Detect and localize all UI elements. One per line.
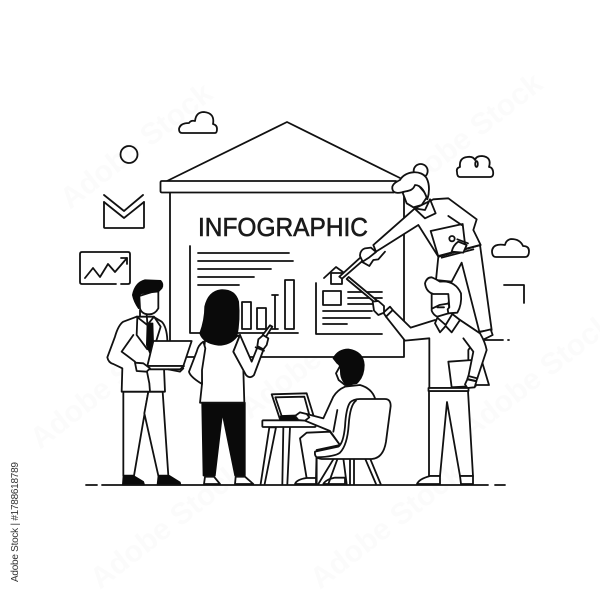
hair xyxy=(392,172,429,199)
lapels and tie xyxy=(147,323,153,353)
chair xyxy=(315,399,391,459)
right arm xyxy=(460,320,487,388)
shirt xyxy=(200,335,244,403)
left arm xyxy=(189,342,205,384)
hair xyxy=(133,280,163,308)
watermark: Adobe Stock xyxy=(384,66,549,206)
watermark: Adobe Stock xyxy=(54,76,219,216)
left chart panel xyxy=(190,246,298,333)
person: seated man at desk xyxy=(261,349,391,484)
folder back xyxy=(470,355,489,385)
leg back xyxy=(436,245,492,332)
board body xyxy=(170,192,404,357)
head xyxy=(336,365,352,385)
stock id caption: Adobe Stock | #1788618789 xyxy=(10,462,21,582)
face xyxy=(403,183,428,207)
icon: cloud top left xyxy=(179,112,217,133)
ear xyxy=(448,299,453,308)
desk xyxy=(261,420,316,484)
hair xyxy=(200,290,239,345)
hand xyxy=(360,248,376,262)
collar xyxy=(414,199,436,218)
shoe xyxy=(478,329,493,339)
watermark: Adobe Stock xyxy=(234,286,399,426)
person: man with pointer and folder xyxy=(347,277,489,388)
laptop xyxy=(147,341,192,366)
bun xyxy=(414,164,428,178)
icon: cloud right lower xyxy=(492,239,529,257)
folder front xyxy=(448,360,476,387)
roof band xyxy=(160,181,396,192)
hand and pen xyxy=(257,335,268,349)
torso and arm xyxy=(386,310,480,388)
hair xyxy=(425,277,461,313)
face xyxy=(432,293,451,317)
right text panel xyxy=(316,267,382,334)
hand xyxy=(135,363,150,372)
hand and cuff xyxy=(383,307,393,317)
person: woman from behind xyxy=(189,290,272,484)
icon: chart card xyxy=(80,252,130,284)
face xyxy=(139,290,158,314)
jacket xyxy=(107,317,167,392)
man legs and shoes xyxy=(417,388,473,484)
ground line xyxy=(86,484,505,486)
pointer stick xyxy=(339,253,367,279)
neck xyxy=(140,310,147,323)
watermark: Adobe Stock xyxy=(84,456,249,596)
watermark: Adobe Stock xyxy=(304,456,469,596)
presentation board xyxy=(160,122,404,357)
decoration: corner bracket xyxy=(504,285,524,303)
icon: circle xyxy=(120,146,138,163)
watermark: Adobe Stock xyxy=(24,316,189,456)
legs xyxy=(123,392,148,476)
laptop xyxy=(272,393,313,419)
roof xyxy=(167,122,400,181)
person: man in suit with laptop xyxy=(107,280,192,485)
board title: INFOGRAPHIC xyxy=(198,212,368,242)
chair legs xyxy=(317,458,381,484)
shoes and shins xyxy=(300,432,340,478)
decoration: short dash by climbing figure xyxy=(485,339,509,341)
person: woman climbing with laptop xyxy=(339,164,493,339)
pointer stick xyxy=(347,277,379,304)
hand xyxy=(295,412,309,421)
trousers xyxy=(202,403,245,476)
shoes xyxy=(123,476,144,485)
collar xyxy=(435,314,460,332)
icon: envelope xyxy=(104,195,144,228)
torso and arm xyxy=(305,385,375,445)
shoes xyxy=(204,477,220,484)
torso and arm xyxy=(373,198,481,257)
laptop xyxy=(431,224,465,257)
icon: cloud right upper xyxy=(457,156,493,177)
right arm xyxy=(233,335,263,377)
